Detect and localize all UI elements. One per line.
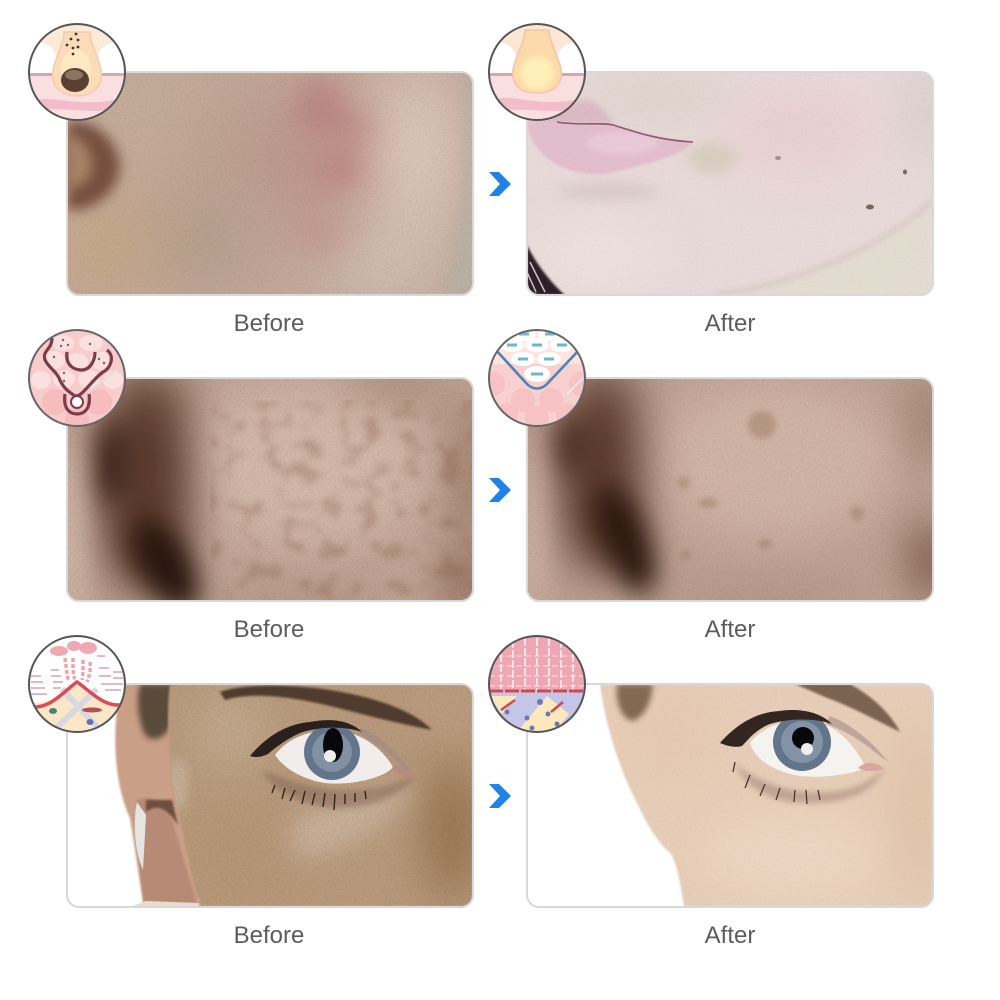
jaw background [838, 226, 924, 285]
ear and hand [115, 684, 200, 907]
arrow: row 1 [489, 172, 511, 196]
panel: before photo, row 1 [60, 60, 473, 300]
eye [250, 720, 415, 810]
panel: after photo, row 3 [599, 685, 932, 906]
label: before, row 1: Before [234, 310, 304, 337]
pigment spots [678, 411, 864, 560]
panel: before photo, row 2 [68, 379, 472, 600]
panel: after photo, row 2 [528, 379, 932, 600]
icon: hydrated cells [488, 329, 586, 427]
arrow: row 2 [489, 478, 511, 502]
panel border [67, 684, 473, 907]
hair near ear [617, 684, 653, 721]
label: after, row 3: After [705, 922, 755, 949]
panel border [67, 378, 473, 601]
nose shadow [67, 122, 120, 210]
icon: clean pore [489, 24, 585, 120]
arrow: row 3 [489, 784, 511, 808]
label: before, row 2: Before [234, 616, 304, 643]
skin [168, 684, 473, 907]
eyebrow [220, 686, 432, 730]
skin [600, 684, 933, 907]
eye [720, 710, 888, 804]
skin spots [775, 156, 907, 210]
label: after, row 1: After [705, 310, 755, 337]
panel border [527, 72, 933, 295]
label: before, row 3: Before [234, 922, 304, 949]
icon: clogged pore [29, 24, 125, 120]
panel border [67, 72, 473, 295]
panel: after photo, row 1 [527, 60, 943, 295]
panel border [527, 684, 933, 907]
icon: damaged skin layers [29, 636, 125, 732]
icon: restored skin layers [489, 636, 585, 732]
lips [527, 100, 693, 174]
icon: pigment cells [29, 330, 125, 432]
panel border [527, 378, 933, 601]
eyebrow [795, 684, 900, 732]
panel: before photo, row 3 [114, 685, 472, 906]
hair [527, 245, 565, 295]
label: after, row 2: After [705, 616, 755, 643]
